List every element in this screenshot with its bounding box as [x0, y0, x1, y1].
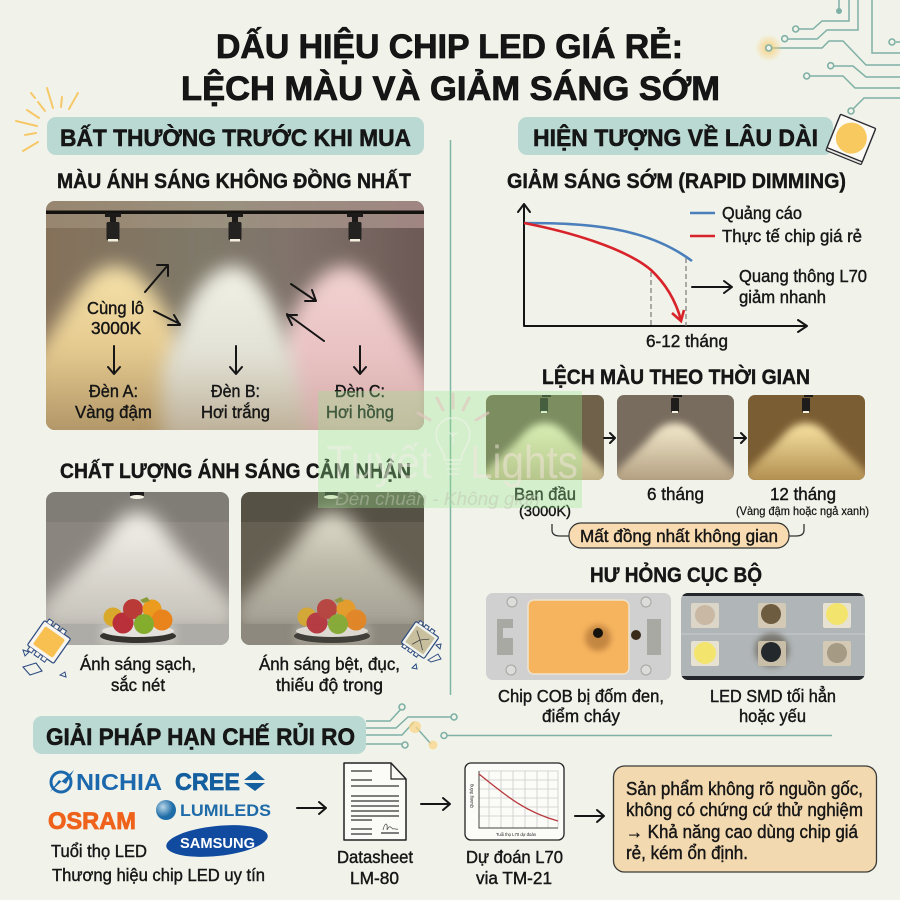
caption: L70 prediction: via TM-21: [476, 868, 552, 888]
caption: SMD strip: LED SMD tối hẳn: [710, 685, 836, 706]
spotlight A: [105, 213, 121, 242]
timeline labels: 6 tháng: [647, 484, 704, 504]
title: [181, 28, 720, 108]
label: brands: Thương hiệu chip LED uy tín: [52, 865, 265, 885]
icon: datasheet document: [344, 763, 406, 840]
arrows between photos: [604, 433, 746, 443]
chart card: L70 prediction: Tuổi thọ L70 dự đoán: [496, 831, 536, 837]
label: brands: Tuổi thọ LED: [51, 841, 147, 861]
callout: warning box: không có chứng cứ thử nghiệm: [626, 800, 863, 820]
caption: clean light: sắc nét: [111, 674, 165, 695]
arrows: [108, 265, 366, 374]
line chart: rapid dimming: [518, 203, 867, 351]
subheading: uneven colour: MÀU ÁNH SÁNG KHÔNG ĐỒNG NHẤT: [57, 169, 411, 193]
subheading: local damage: HƯ HỎNG CỤC BỘ: [590, 563, 762, 587]
caption: dull light: thiếu độ trong: [276, 675, 383, 695]
arrow: [421, 798, 450, 810]
label: same batch: Cùng lô: [87, 298, 144, 318]
watermark: Lights: [470, 436, 578, 488]
label: lamp C: Hơi hồng: [326, 402, 394, 422]
callout: loss of uniformity: [552, 523, 804, 548]
caption: L70 prediction: [466, 847, 563, 888]
chart card: L70 prediction: [465, 763, 564, 840]
photo: dull light: [235, 492, 431, 645]
heading: before buying: [47, 117, 424, 155]
caption: COB chip: Chip COB bị đốm đen,: [498, 686, 664, 706]
logo: Lumileds: LUMILEDS: [180, 801, 271, 820]
caption: dull light: Ánh sáng bệt, đục,: [259, 654, 400, 674]
logo: Cree: CREE: [175, 769, 240, 796]
caption: COB chip: điểm cháy: [542, 706, 620, 726]
icon: LED chip top right: [826, 114, 876, 165]
arrow: [575, 810, 604, 822]
label: lamp A: Vàng đậm: [75, 402, 152, 422]
brand logos: [48, 769, 271, 861]
photo: three spotlights: [46, 201, 424, 430]
photo: 6 months: [617, 395, 734, 480]
timeline labels: (Vàng đậm hoặc ngả xanh): [736, 504, 869, 518]
chart axes: [518, 204, 807, 332]
logo: Osram: OSRAM: [48, 808, 136, 835]
caption: clean light: [80, 654, 196, 695]
photo: clean light: [40, 492, 236, 645]
heading: long term: [518, 117, 833, 155]
photo: initial: [486, 395, 604, 480]
heading: long term: HIỆN TƯỢNG VỀ LÂU DÀI: [533, 124, 818, 152]
x label: 6-12 tháng: [646, 331, 728, 351]
actual curve: [524, 223, 684, 321]
callout: L70: Quang thông L70: [739, 266, 867, 286]
chart card: L70 prediction: Quang thông: [469, 784, 474, 808]
advertised curve: [524, 223, 692, 261]
heading: solutions: GIẢI PHÁP HẠN CHẾ RỦI RO: [46, 722, 355, 751]
label: same batch: [87, 298, 144, 338]
heading: solutions: [33, 716, 366, 754]
subheading: perceived quality: CHẤT LƯỢNG ÁNH SÁNG CẢM NHẬN: [60, 459, 411, 483]
label: lamp B: Hơi trắng: [201, 401, 270, 422]
caption: SMD strip: [710, 685, 836, 726]
caption: dull light: [259, 654, 400, 695]
photo: SMD strip: [681, 593, 865, 680]
photo: 12 months: [748, 395, 865, 480]
callout: loss of uniformity: Mất đồng nhất không gian: [580, 526, 778, 546]
label: lamp A: Đèn A:: [89, 381, 138, 401]
icon: intact LED chip: [23, 617, 73, 677]
photo: COB chip: [486, 593, 671, 680]
label: lamp B: [201, 381, 270, 422]
caption: datasheet: [337, 847, 413, 888]
label: lamp C: [326, 381, 394, 422]
callout: warning box: [614, 766, 876, 872]
dashed markers: [651, 258, 686, 326]
caption: SMD strip: hoặc yếu: [739, 706, 806, 726]
logo: Samsung: SAMSUNG: [180, 835, 255, 852]
caption: L70 prediction: Dự đoán L70: [466, 847, 563, 867]
timeline labels: Ban đầu: [514, 484, 576, 504]
callout: L70: [692, 266, 867, 307]
label: lamp A: [75, 381, 152, 422]
icon: cracked LED chip: [399, 619, 441, 669]
caption: clean light: Ánh sáng sạch,: [80, 654, 196, 674]
callout: warning box: rẻ, kém ổn định.: [626, 843, 748, 863]
divider: [450, 140, 452, 695]
label: brands: [51, 841, 265, 885]
watermark: [318, 391, 582, 509]
caption: COB chip: [498, 686, 664, 726]
label: lamp B: Đèn B:: [211, 381, 260, 401]
circuit decoration bottom: [366, 704, 832, 750]
arrow: [297, 802, 326, 814]
circuit decoration top right: [755, 0, 900, 114]
timeline labels: [514, 484, 869, 520]
label: same batch: 3000K: [91, 318, 141, 338]
timeline labels: (3000K): [519, 503, 571, 520]
watermark: Đèn chuẩn - Không gian: [335, 489, 540, 509]
legend: Quảng cáo: [722, 203, 802, 223]
subheading: rapid dimming: GIẢM SÁNG SỚM (RAPID DIMMING): [507, 169, 846, 193]
logo: Nichia: NICHIA: [76, 769, 162, 795]
title: DẤU HIỆU CHIP LED GIÁ RẺ:: [216, 28, 683, 66]
heading: before buying: BẤT THƯỜNG TRƯỚC KHI MUA: [60, 124, 411, 152]
title: LỆCH MÀU VÀ GIẢM SÁNG SỚM: [181, 70, 720, 108]
legend: Thực tế chip giá rẻ: [722, 226, 862, 246]
caption: datasheet: Datasheet: [337, 847, 413, 867]
spotlight C: [347, 213, 363, 242]
subheading: colour shift: LỆCH MÀU THEO THỜI GIAN: [542, 365, 810, 389]
logo: Samsung: [165, 821, 269, 861]
callout: L70: giảm nhanh: [739, 287, 826, 307]
legend: [690, 203, 862, 246]
spotlight B: [227, 213, 243, 242]
callout: warning box: → Khả năng cao dùng chip giá: [626, 822, 859, 842]
callout: warning box: Sản phẩm không rõ nguồn gốc,: [626, 779, 863, 799]
label: lamp C: Đèn C:: [335, 381, 385, 401]
icon: sun rays: [16, 88, 78, 151]
timeline labels: 12 tháng: [770, 484, 836, 504]
watermark: Tuyết: [326, 436, 432, 488]
caption: datasheet: LM-80: [350, 868, 399, 888]
